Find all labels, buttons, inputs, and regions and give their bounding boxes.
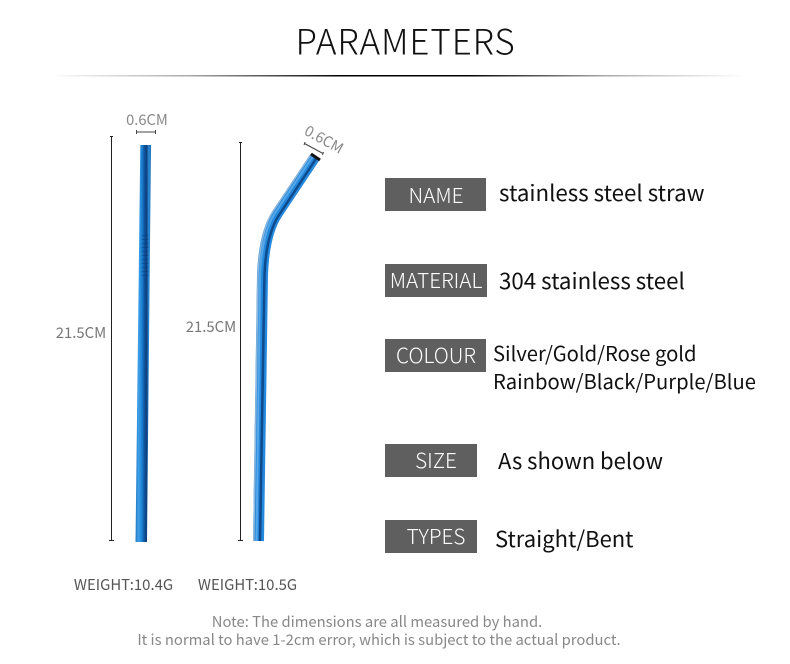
width label: bent straw: 0.6CM xyxy=(301,120,347,158)
note: Note: The dimensions are all measured by hand. xyxy=(212,611,542,632)
label: name xyxy=(385,178,486,211)
height dimension line: straight straw xyxy=(109,136,114,540)
row: types: TYPES xyxy=(407,520,465,550)
row: material xyxy=(385,264,685,297)
width bracket: bent straw xyxy=(304,142,324,155)
bent straw diagram xyxy=(186,120,347,595)
label: size xyxy=(385,444,477,477)
row: name xyxy=(385,176,705,211)
row: size: SIZE xyxy=(415,444,457,474)
bent straw xyxy=(254,154,320,541)
height label: straight straw: 21.5CM xyxy=(56,322,106,343)
row: colour: COLOUR xyxy=(396,339,476,369)
width label: straight straw: 0.6CM xyxy=(126,109,168,130)
row: colour xyxy=(385,338,756,395)
label: types xyxy=(385,520,477,553)
value: colour: Silver/Gold/Rose gold xyxy=(493,338,697,367)
value: size: As shown below xyxy=(498,444,663,476)
row: types xyxy=(385,520,633,554)
height label: bent straw: 21.5CM xyxy=(186,316,236,337)
title rule xyxy=(50,75,745,76)
value: material: 304 stainless steel xyxy=(499,264,685,296)
title: PARAMETERS xyxy=(295,14,516,66)
weight label: straight straw: WEIGHT:10.4G xyxy=(74,574,173,595)
value: colour: Rainbow/Black/Purple/Blue xyxy=(493,366,756,395)
straight straw diagram xyxy=(56,109,173,595)
row: size xyxy=(385,444,663,477)
label: material xyxy=(385,264,487,297)
value: name: stainless steel straw xyxy=(499,176,705,208)
row: material: MATERIAL xyxy=(390,264,482,294)
width bracket: straight straw xyxy=(136,130,156,134)
label: colour xyxy=(385,339,486,372)
value: types: Straight/Bent xyxy=(495,522,633,554)
note xyxy=(137,611,621,650)
note: It is normal to have 1-2cm error, which is subject to the actual product. xyxy=(137,629,621,650)
value: colour xyxy=(493,338,756,395)
weight label: bent straw: WEIGHT:10.5G xyxy=(198,574,297,595)
height dimension line: bent straw xyxy=(238,142,243,540)
straight straw xyxy=(136,145,151,542)
row: name: NAME xyxy=(409,179,463,209)
